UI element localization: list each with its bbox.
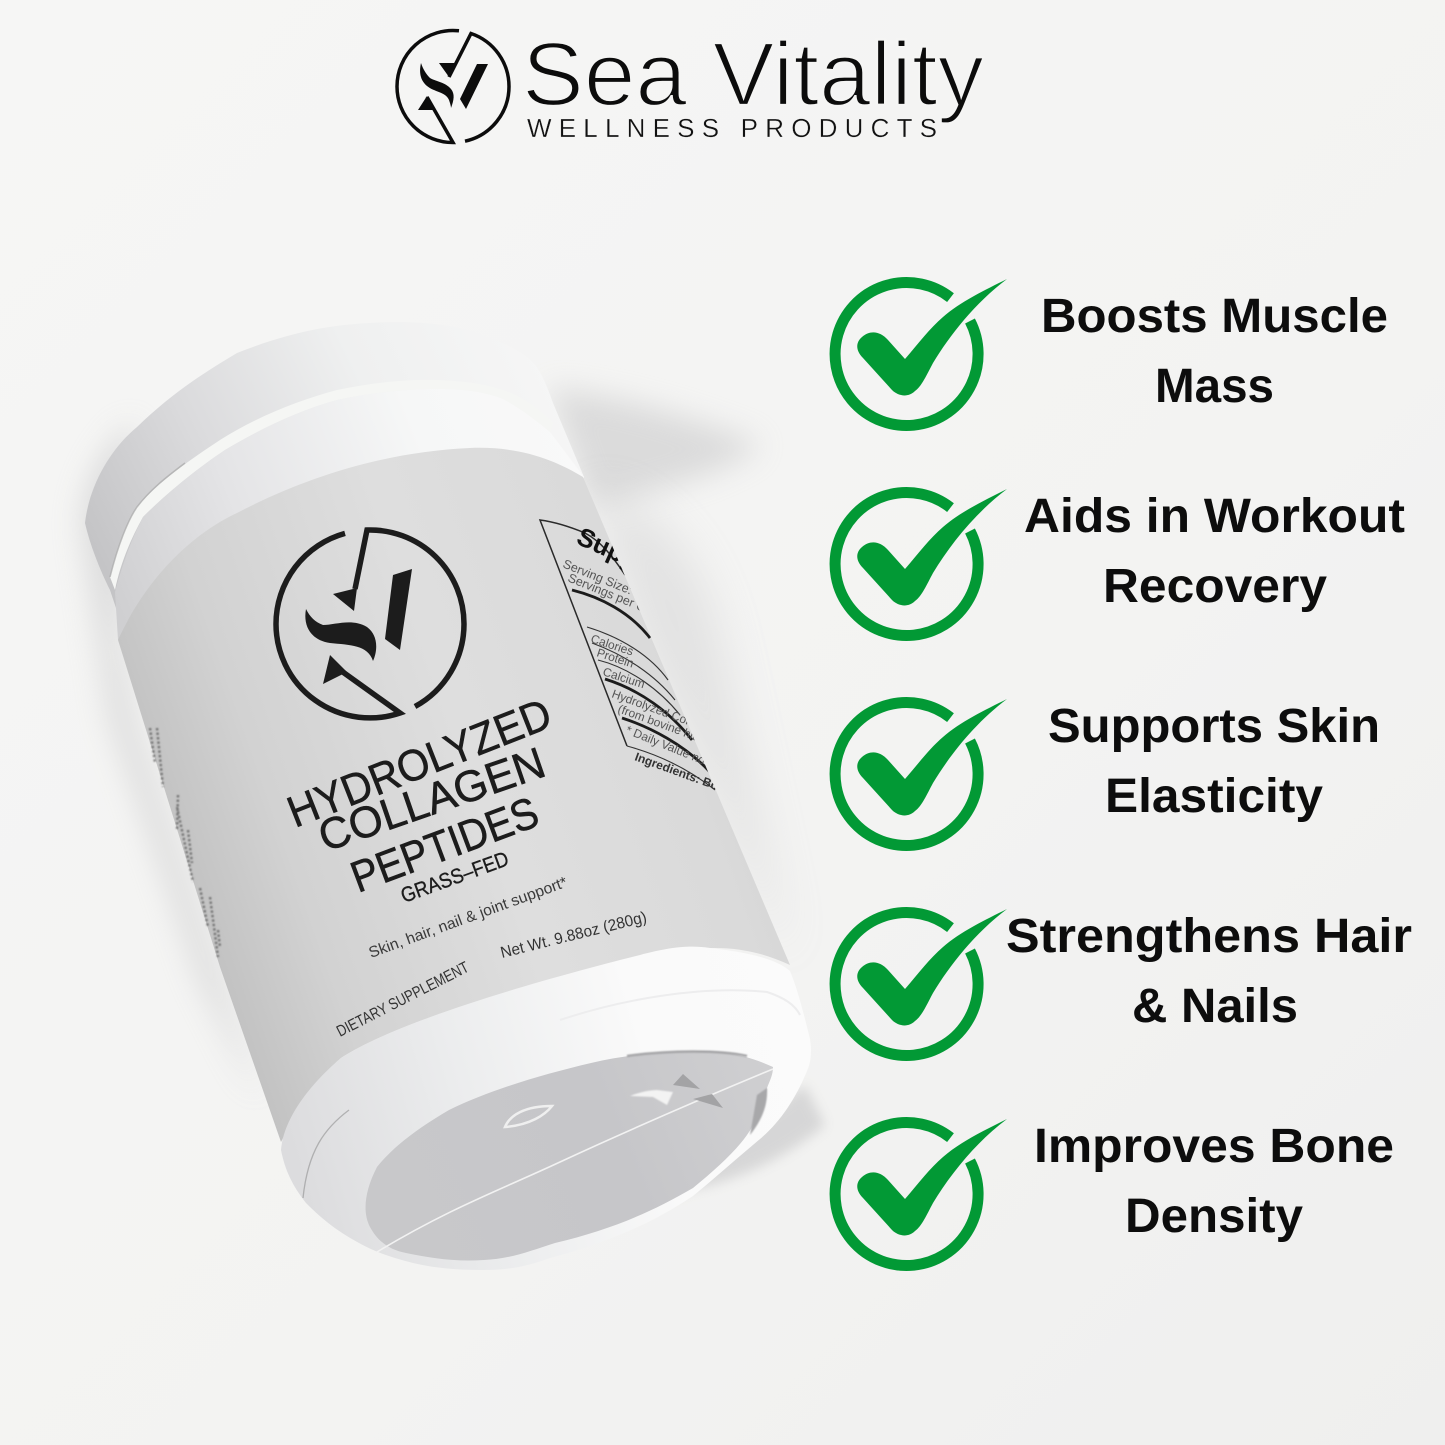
supplement facts panel: Calories: [589, 632, 635, 658]
icon: green check: [835, 279, 1007, 426]
net weight: Net Wt. 9.88oz (280g): [499, 909, 649, 962]
label logo: [276, 530, 464, 718]
panel outline: [540, 520, 627, 746]
icon: green check: [835, 489, 1007, 636]
cap gate highlight: [630, 1090, 673, 1105]
product name line 2: COLLAGEN: [312, 738, 551, 861]
benefit 2: [835, 489, 1405, 636]
benefit text: Aids in Workout: [1024, 490, 1405, 543]
benefits list: [835, 279, 1412, 1266]
panel thick rules: [572, 590, 710, 772]
supplement facts panel: * Daily Value not established: [624, 723, 770, 793]
cap rim line: [303, 1110, 349, 1198]
logo ring right: [355, 530, 464, 706]
tagline: Skin, hair, nail & joint support*: [367, 874, 570, 962]
benefit text: Density: [1125, 1190, 1303, 1243]
cap mold line: [377, 1069, 773, 1252]
product bottle: [85, 322, 811, 1270]
bottom cap: [281, 947, 811, 1270]
icon: green check: [835, 699, 1007, 846]
supplement facts panel: Calcium: [601, 665, 647, 691]
cap groove: [560, 990, 800, 1020]
bottle shadow: [82, 388, 825, 1205]
benefit text: Improves Bone: [1034, 1120, 1394, 1173]
cap underside face: [366, 1051, 773, 1261]
benefit 4: [835, 909, 1412, 1056]
supplement facts panel: Supplement: [573, 521, 721, 609]
logo mark: [397, 30, 509, 143]
lid band: [115, 389, 584, 650]
icon: green check: [835, 909, 1007, 1056]
benefit text: Recovery: [1103, 560, 1327, 613]
brand logo: [397, 25, 984, 143]
icon: green check: [835, 1119, 1007, 1266]
bottle lid: [85, 322, 584, 680]
benefit text: Boosts Muscle: [1041, 290, 1388, 343]
panel thin rules: [587, 627, 715, 790]
groove shadow line: [110, 463, 185, 577]
supplement facts panel: Ingredients: Bovine: [633, 750, 743, 801]
logo marks: [305, 569, 412, 684]
face right shadow: [750, 1088, 767, 1135]
supplement facts panel: Protein: [595, 646, 636, 671]
bottle body label: [118, 448, 790, 1142]
grass-fed: GRASS–FED: [398, 847, 512, 908]
benefit text: Mass: [1155, 360, 1274, 413]
supplement facts panel: Servings per Container: [566, 571, 690, 632]
cap gate notch: [673, 1074, 723, 1108]
dietary supplement: DIETARY SUPPLEMENT: [334, 959, 472, 1041]
lid groove: [110, 380, 553, 590]
benefit 1: [835, 279, 1388, 426]
faint side text on label: [150, 728, 220, 957]
benefit 3: [835, 699, 1380, 846]
benefit text: & Nails: [1132, 980, 1298, 1033]
benefit text: Supports Skin: [1048, 700, 1380, 753]
logo ring left: [276, 533, 400, 718]
brand tagline: WELLNESS PRODUCTS: [527, 113, 937, 143]
supplement facts panel: (from bovine hide): [616, 702, 712, 748]
product name line 3: PEPTIDES: [344, 788, 545, 902]
supplement facts panel: [538, 519, 716, 790]
product name: HYDROLYZED: [281, 689, 558, 837]
supplement facts panel: Hydrolyzed Collagen: [610, 687, 719, 738]
cap mold mark: [505, 1106, 552, 1127]
benefit text: Elasticity: [1105, 770, 1323, 823]
benefit 5: [835, 1119, 1394, 1266]
supplement facts panel: Serving Size: 1 Scoop: [561, 557, 680, 616]
brand name: Sea Vitality: [522, 25, 984, 125]
face upper shadow: [627, 1052, 747, 1056]
benefit text: Strengthens Hair: [1006, 910, 1412, 963]
